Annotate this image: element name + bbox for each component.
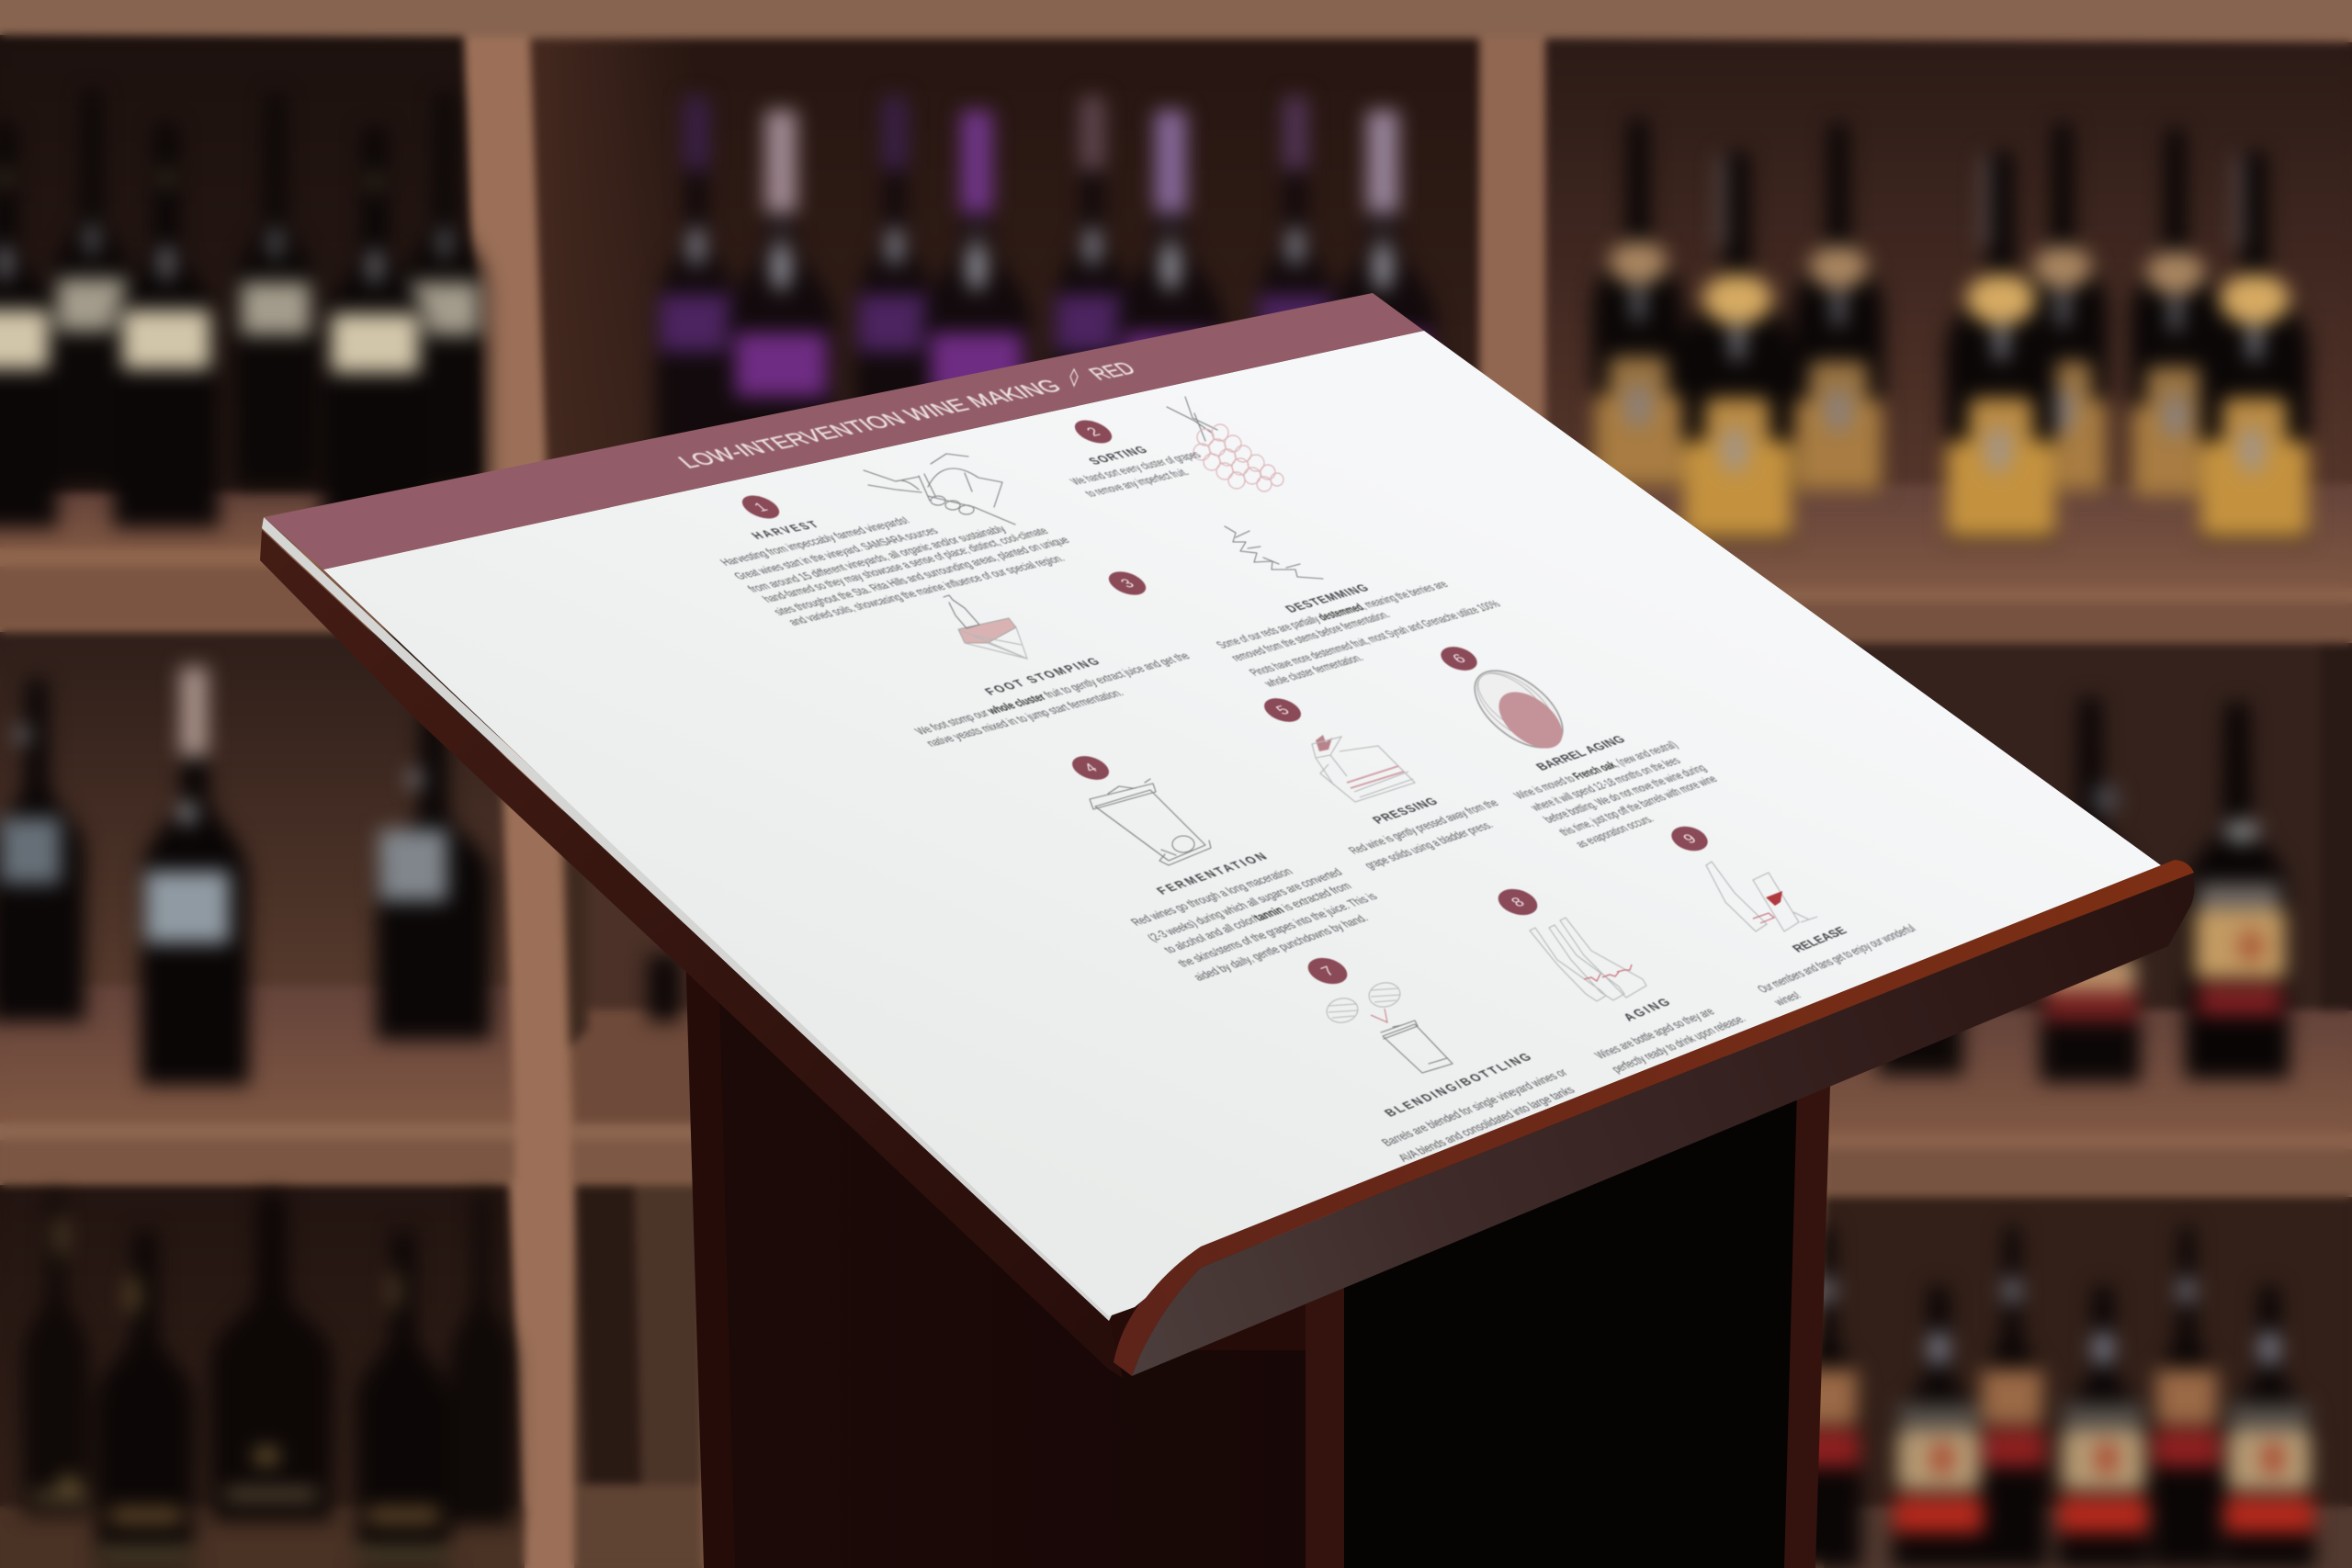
bottles: bottom left cubby: [23, 1194, 514, 1568]
step 2: sorting: [1067, 397, 1283, 499]
body text: AVA blends and consolidated into large tanks: [1395, 1084, 1578, 1164]
badge 1: [735, 493, 786, 521]
badge 5: [1257, 694, 1308, 726]
body text: Pinots have more destemmed fruit, most Syrah and Grenache utilize 100%: [1246, 598, 1504, 678]
body text: as evaporation occurs.: [1572, 813, 1657, 850]
icon: three bottles: [1530, 918, 1646, 1001]
badge 4: [1065, 752, 1116, 784]
step 4: fermentation: [1065, 752, 1381, 983]
bottles: top middle cubby with purple labels: [656, 96, 1437, 533]
heading: FERMENTATION: [1153, 851, 1270, 897]
body text: before bottling. We do not move the wine during: [1540, 762, 1709, 825]
body text: [1067, 448, 1204, 499]
body text: sites throughout the Sta. Rita Hills and surrounding areas, planted on unique: [770, 535, 1072, 617]
heading: BLENDING/BOTTLING: [1381, 1051, 1534, 1119]
heading: FOOT STOMPING: [981, 656, 1102, 697]
body text: and varied soils, showcasing the marine influence of our special region.: [785, 552, 1068, 627]
heading: DESTEMMING: [1282, 582, 1372, 615]
step: destemming: [1213, 526, 1504, 689]
stem right panel: [1344, 1056, 1804, 1568]
heading: AGING: [1620, 996, 1673, 1023]
badge 8: 8: [1508, 895, 1529, 909]
badge 8: [1490, 885, 1545, 919]
title: [673, 358, 1141, 472]
bottles: middle right cubby: [1878, 697, 2290, 1082]
badge 7: [1300, 953, 1355, 988]
step 8: aging: [1490, 885, 1748, 1075]
body text: from around 15 different vineyards, all organic and/or sustainably: [744, 523, 1010, 594]
heading: RELEASE: [1789, 924, 1849, 954]
icon: grape cluster: [1167, 397, 1283, 491]
body text: (2-3 weeks) during which all sugars are converted: [1144, 866, 1345, 943]
heading: PRESSING: [1369, 795, 1441, 826]
icon: bladder press: [1312, 735, 1415, 802]
step 1: harvest: [717, 454, 1072, 627]
body text: Wine is moved to French oak, (new and neutral): [1510, 739, 1680, 801]
stem left panel: [684, 919, 1306, 1568]
body text: Barrels are blended for single vineyard wines or: [1378, 1066, 1571, 1148]
body text: [1213, 579, 1504, 689]
body text: [1510, 739, 1720, 850]
badge 9: 9: [1679, 831, 1700, 846]
badge 3: [1101, 569, 1154, 598]
heading: HARVEST: [748, 519, 821, 541]
badge 9: [1664, 822, 1715, 855]
icon: barrel cross-section: [1461, 656, 1577, 762]
plaque wooden front lip face: [1132, 873, 2194, 1376]
plaque wooden front lip edge: [1114, 860, 2194, 1376]
heading: BARREL AGING: [1532, 733, 1628, 773]
step 9: release: [1664, 822, 1918, 1008]
badge 3: 3: [1116, 576, 1138, 591]
body text: to remove any imperfect fruit.: [1081, 467, 1192, 499]
badge 2: [1068, 418, 1119, 446]
body text: aided by daily, gentle punchdowns by hand.: [1190, 912, 1371, 983]
icon: destemmed stalk: [1225, 526, 1323, 579]
bottles: bottom right cubby with red bands: [1792, 1226, 2315, 1568]
plaque sheet thickness edge: [262, 517, 1114, 1321]
body text: We hand sort every cluster of grapes: [1067, 448, 1204, 487]
step 3: foot stomping: [911, 569, 1193, 749]
body text: Red wines go through a long maceration: [1127, 865, 1295, 928]
body text: [1591, 1006, 1748, 1075]
body text: Some of our reds are partially destemmed, meaning the berries are: [1213, 579, 1451, 650]
step 5: pressing: [1257, 694, 1501, 871]
body text: removed from the stems before fermentation.: [1227, 609, 1393, 663]
bottles: top right cubby with gold labels: [1593, 118, 2310, 541]
body text: the skins/stems of the grapes into the juice. This is: [1174, 890, 1381, 969]
plaque header band: [264, 293, 1424, 570]
body text: whole cluster fermentation.: [1260, 652, 1366, 689]
icon: fermentation tank: [1090, 779, 1211, 865]
body text: wines!: [1770, 989, 1804, 1008]
plaque wooden left side: [260, 530, 1123, 1378]
body text: [1754, 922, 1918, 1008]
body text: Harvesting from impeccably farmed vineyards!: [717, 514, 912, 568]
badge 2: 2: [1082, 424, 1104, 439]
body text: Great wines start in the vineyard. SAMSARA sources: [730, 525, 942, 581]
icon: barrels into tank: [1325, 980, 1453, 1073]
body text: where it will spend 12-18 months on the lees: [1527, 755, 1684, 813]
podium stem: [684, 919, 1831, 1568]
body text: to alcohol and all color/tannin is extracted from: [1160, 880, 1354, 955]
badge 1: 1: [750, 500, 772, 514]
icon: foot stomping crate: [944, 595, 1027, 659]
stem right strip: [1784, 1056, 1831, 1568]
badge 6: [1433, 643, 1485, 674]
plaque contents: [673, 358, 1918, 1164]
badge 7: 7: [1317, 964, 1339, 978]
badge 4: 4: [1080, 761, 1102, 775]
body text: [1345, 796, 1501, 871]
stem centre strip: [1306, 1277, 1344, 1568]
bottles: middle left cubby with grey labels: [0, 667, 681, 1085]
step 6: barrel aging: [1433, 643, 1720, 850]
icon: shears and hand: [864, 454, 1015, 525]
body text: native yeasts mixed in to jump start fermentation.: [922, 687, 1126, 749]
body text: grape solids using a bladder press.: [1361, 819, 1496, 871]
badge 6: 6: [1449, 651, 1469, 666]
body text: Our members and fans get to enjoy our wonderful: [1754, 922, 1918, 995]
body text: this time, just top off the barrels with more wine: [1555, 773, 1720, 838]
badge 5: 5: [1272, 703, 1294, 717]
body text: perfectly ready to drink upon release.: [1608, 1012, 1748, 1075]
icon: bottle and glass: [1706, 862, 1817, 931]
body text: [717, 514, 1072, 627]
body text: [1127, 865, 1381, 983]
step 7: blending and bottling: [1300, 953, 1578, 1164]
bottles: top left cubby: [0, 90, 487, 531]
title: RED: [1083, 358, 1141, 384]
body text: We foot stomp our whole cluster fruit to gently extract juice and get the: [911, 650, 1193, 737]
body text: hand-farmed so they may showcase a sense of place; distinct, cool-climate: [759, 525, 1051, 604]
plaque sheet white surface: [323, 331, 2161, 1316]
body text: Wines are bottle aged so they are: [1591, 1006, 1717, 1061]
title: LOW-INTERVENTION WINE MAKING: [673, 376, 1067, 472]
body text: Red wine is gently pressed away from the: [1345, 796, 1501, 856]
heading: SORTING: [1085, 444, 1150, 467]
